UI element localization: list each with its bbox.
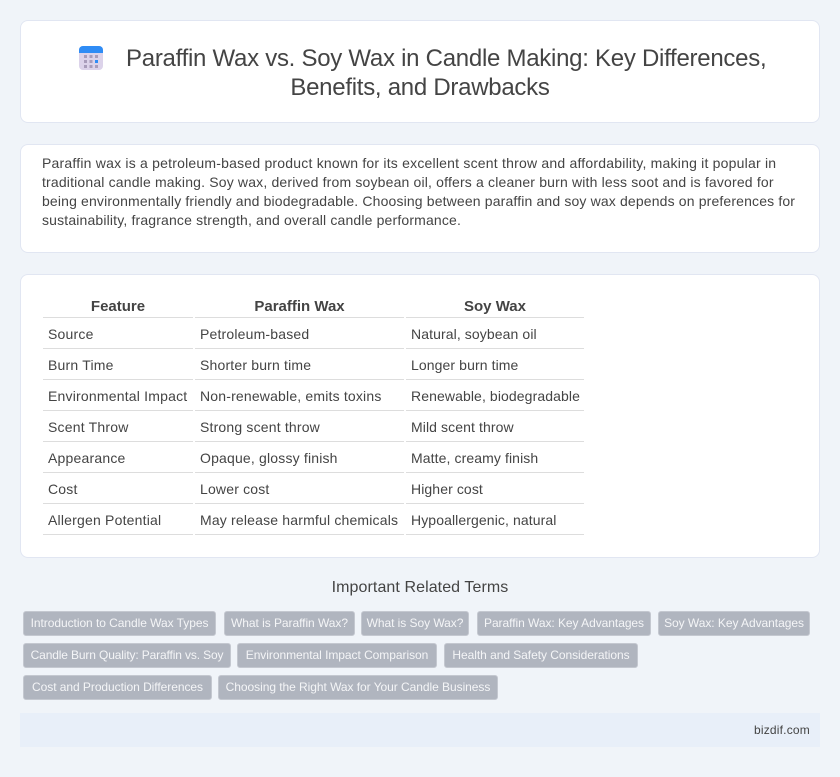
icon: calendar: [79, 46, 103, 70]
comparison table: Non-renewable, emits toxins: [200, 388, 382, 404]
text block: description: sustainability, fragrance strength, and overall candle performance.: [42, 212, 461, 228]
comparison table: Renewable, biodegradable: [411, 388, 580, 404]
title: Paraffin Wax vs. Soy Wax in Candle Making: Key Differences,: [126, 45, 766, 72]
comparison table: Soy Wax: [464, 298, 526, 315]
comparison table: Shorter burn time: [200, 357, 311, 373]
comparison table: Scent Throw: [48, 419, 129, 435]
comparison table: Longer burn time: [411, 357, 518, 373]
footer credit: bizdif.com: [754, 723, 810, 737]
comparison table: Mild scent throw: [411, 419, 514, 435]
panel: comparison table: [20, 274, 820, 558]
comparison table: Matte, creamy finish: [411, 450, 538, 466]
related term tags: What is Soy Wax?: [367, 616, 463, 630]
comparison table: Natural, soybean oil: [411, 326, 537, 342]
related term tags: Environmental Impact Comparison: [246, 648, 428, 662]
comparison table: Hypoallergenic, natural: [411, 512, 556, 528]
heading: related terms: Important Related Terms: [332, 579, 508, 596]
related term tags: Introduction to Candle Wax Types: [31, 616, 208, 630]
comparison table: May release harmful chemicals: [200, 512, 398, 528]
footer bar: [20, 713, 820, 747]
comparison table: Environmental Impact: [48, 388, 187, 404]
panel: header: [20, 20, 820, 123]
title: Benefits, and Drawbacks: [290, 74, 550, 101]
comparison table: Source: [48, 326, 94, 342]
text block: description: Paraffin wax is a petroleum-based product known for its excellent scent throw and affordability, making it popular in: [42, 155, 776, 171]
comparison table: Burn Time: [48, 357, 114, 373]
comparison table: Strong scent throw: [200, 419, 320, 435]
comparison table: Allergen Potential: [48, 512, 161, 528]
comparison table: Opaque, glossy finish: [200, 450, 338, 466]
panel: description: [20, 144, 820, 253]
text block: description: [42, 155, 795, 228]
related term tags: What is Paraffin Wax?: [231, 616, 348, 630]
comparison table: Petroleum-based: [200, 326, 309, 342]
comparison table: Feature: [91, 298, 145, 315]
related term tags: Soy Wax: Key Advantages: [664, 616, 804, 630]
text block: description: traditional candle making. Soy wax, derived from soybean oil, offers a cleaner burn with less soot and is favored for: [42, 174, 774, 190]
related term tags: Paraffin Wax: Key Advantages: [484, 616, 644, 630]
title: [126, 45, 766, 101]
related term tags: Cost and Production Differences: [32, 680, 203, 694]
comparison table: Paraffin Wax: [254, 298, 345, 315]
comparison table: Appearance: [48, 450, 126, 466]
related term tags: [23, 611, 810, 700]
related term tags: Candle Burn Quality: Paraffin vs. Soy: [31, 648, 223, 662]
related term tags: Health and Safety Considerations: [452, 648, 630, 662]
comparison table: Cost: [48, 481, 78, 497]
related term tags: Choosing the Right Wax for Your Candle Business: [226, 680, 490, 694]
comparison table: Lower cost: [200, 481, 270, 497]
comparison table: Higher cost: [411, 481, 483, 497]
comparison table: [43, 298, 584, 535]
text block: description: being environmentally friendly and biodegradable. Choosing between paraffin and soy wax depends on preferences for: [42, 193, 795, 209]
